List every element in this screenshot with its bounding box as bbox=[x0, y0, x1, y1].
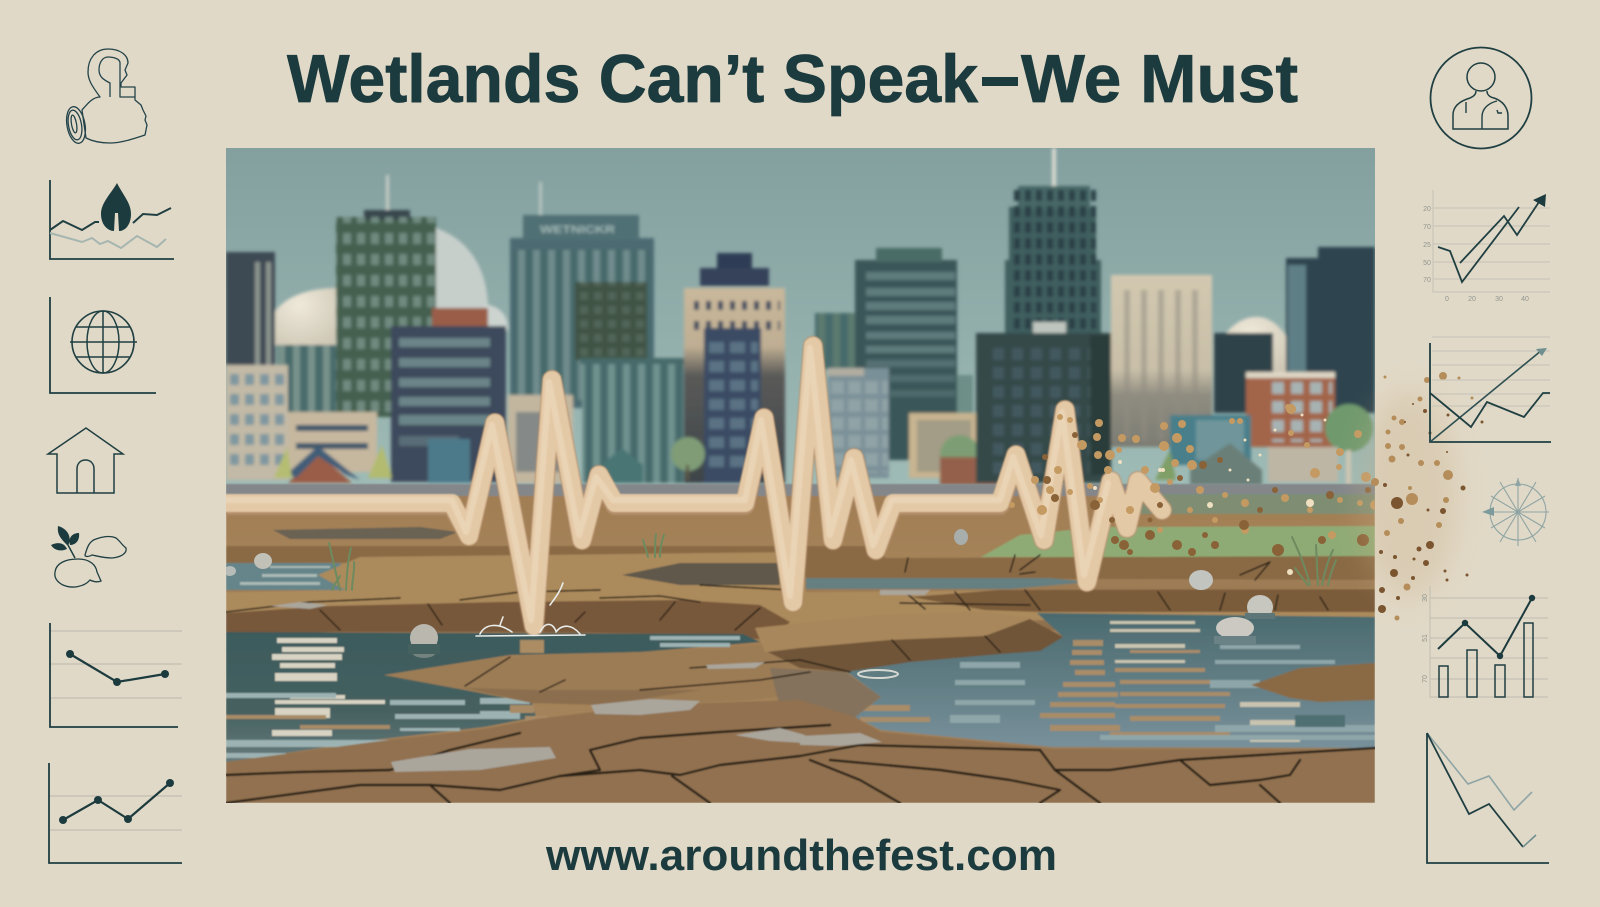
icon: globe chart bbox=[50, 297, 156, 393]
left curb bbox=[226, 600, 790, 640]
slab curb bbox=[768, 619, 1063, 672]
chart: declining lines bbox=[1427, 733, 1549, 863]
chart: bars with line bbox=[1422, 586, 1548, 697]
grass tufts bbox=[329, 534, 1336, 590]
splash bbox=[476, 583, 585, 636]
chart: line with arrow and axis numbers: 50 bbox=[1423, 260, 1431, 267]
icon: thumbs up bbox=[64, 49, 147, 145]
icon: sprout with clouds bbox=[51, 526, 126, 587]
title: Wetlands Can’t Speak bbox=[287, 41, 978, 117]
icon: house bbox=[48, 428, 123, 493]
large soil specks bbox=[1371, 372, 1474, 620]
heartbeat tube bbox=[226, 346, 1162, 626]
central platform bbox=[226, 552, 1375, 625]
water ring bbox=[858, 670, 898, 678]
website url: www.aroundthefest.com bbox=[545, 831, 1057, 880]
chart: line with arrow and axis numbers: 0 bbox=[1445, 296, 1449, 303]
wetland foreground ground and water bbox=[226, 484, 1375, 803]
right water bbox=[840, 613, 1375, 748]
chart: bars with line: 70 bbox=[1422, 675, 1429, 683]
chart: line with arrow and axis numbers: 40 bbox=[1521, 296, 1529, 303]
soil particles in scene bbox=[1009, 404, 1380, 539]
chart: line with arrow and axis numbers: 70 bbox=[1423, 224, 1431, 231]
chart: falling line with points bbox=[50, 623, 182, 727]
far haze and mud bbox=[226, 496, 1375, 630]
dark far water bbox=[273, 527, 458, 539]
title: — bbox=[985, 64, 1015, 96]
far curb bbox=[226, 546, 1375, 580]
central slab bbox=[385, 674, 775, 702]
sky bbox=[226, 148, 1375, 498]
stones bbox=[224, 529, 1275, 658]
chart: line with arrow and axis numbers: 20 bbox=[1423, 206, 1431, 213]
main ground bbox=[231, 629, 1375, 762]
right stone mound bbox=[1251, 663, 1375, 702]
left water bbox=[226, 632, 760, 762]
chart: bars with line: 30 bbox=[1422, 594, 1429, 602]
icon: compass bbox=[1482, 478, 1549, 546]
chart: line with arrow and axis numbers: 70 bbox=[1423, 277, 1431, 284]
icon: chart with leaf drop bbox=[50, 180, 174, 259]
chart: crossing lines with arrow bbox=[1430, 337, 1551, 442]
grass field bbox=[981, 526, 1375, 557]
far right water strip bbox=[806, 578, 1090, 589]
icon: person in circle bbox=[1430, 48, 1532, 148]
right slab top bbox=[754, 620, 1036, 652]
upper curb right bbox=[911, 589, 1375, 612]
dark ellipse patch bbox=[622, 563, 780, 585]
bottom ground band bbox=[255, 700, 1374, 762]
photo panel: wetland heartbeat scene bbox=[224, 148, 1380, 803]
road band bbox=[226, 484, 1375, 498]
left distant water bbox=[226, 563, 350, 590]
pale flat stones bbox=[270, 590, 930, 772]
title: We Must bbox=[1021, 41, 1298, 117]
chart: line with arrow and axis numbers: 30 bbox=[1495, 296, 1503, 303]
right water reflections bbox=[860, 621, 1375, 742]
cracks bbox=[226, 555, 1375, 803]
city skyline bbox=[226, 148, 1375, 485]
chart: rising line with points bbox=[49, 763, 182, 863]
chart: line with arrow and axis numbers bbox=[1423, 190, 1550, 303]
building sign: WETNICKR bbox=[540, 224, 615, 236]
left water reflections bbox=[226, 636, 740, 758]
lower left rock bbox=[770, 668, 881, 717]
chart: bars with line: 51 bbox=[1422, 634, 1429, 642]
chart: line with arrow and axis numbers: 20 bbox=[1468, 296, 1476, 303]
chart: line with arrow and axis numbers: 25 bbox=[1423, 242, 1431, 249]
dust dispersal beyond the photo bbox=[1358, 372, 1484, 620]
